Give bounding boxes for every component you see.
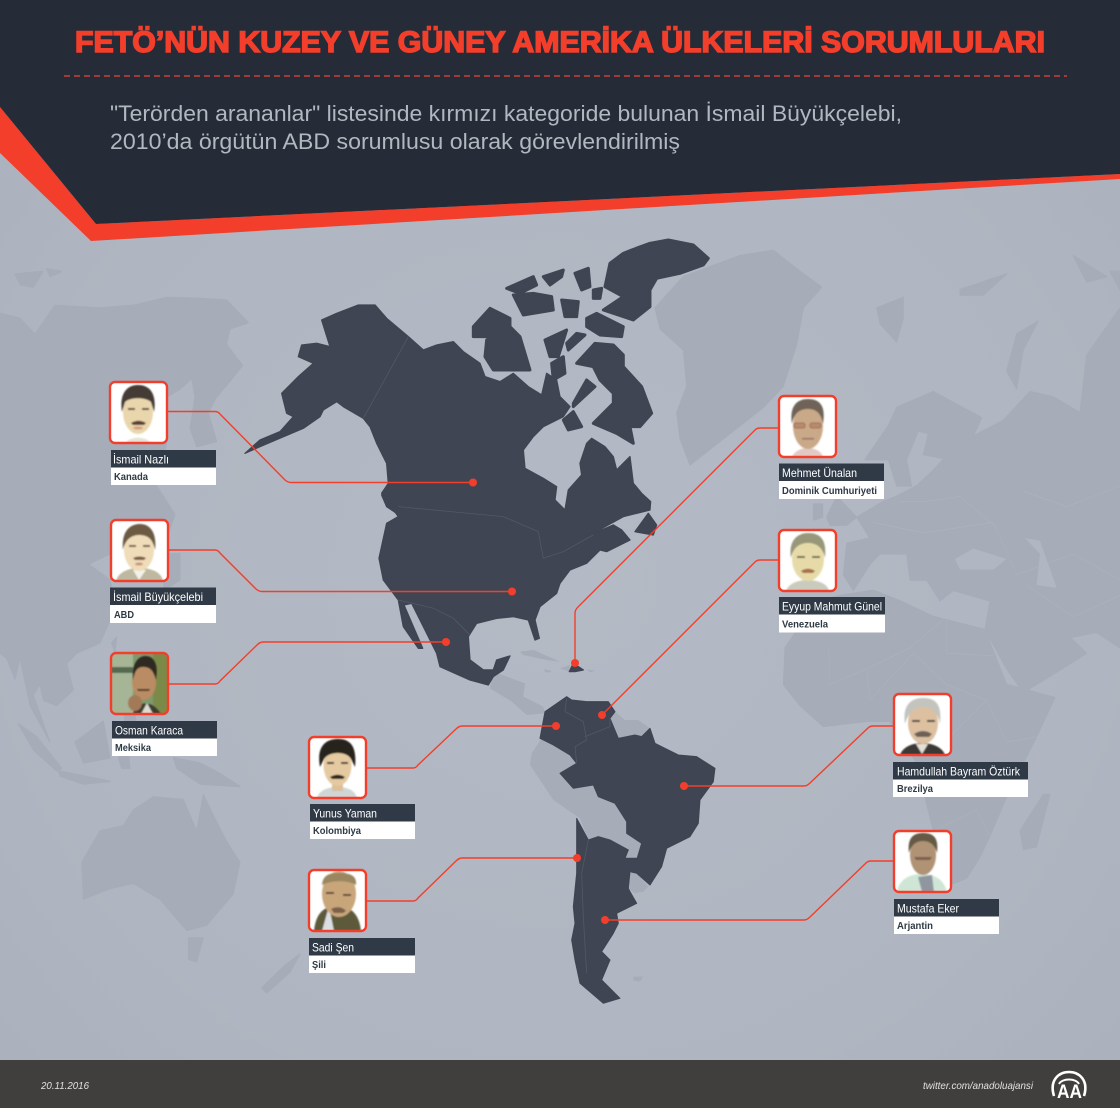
card: Sadi Şen: Sadi Şen: [312, 940, 354, 954]
icon: AA logo: [1053, 1072, 1085, 1103]
connector: Yunus Yaman to Colombia: [366, 722, 560, 768]
subtitle line 1: "Terörden arananlar" listesinde kırmızı kategoride bulunan İsmail Büyükçelebi,: [110, 101, 902, 126]
card: Mehmet Ünalan: [779, 396, 884, 499]
mainland: Alaska, Canada, USA, Mexico: [245, 305, 651, 685]
card: Osman Karaca: [111, 653, 217, 756]
card: Mustafa Eker: [894, 831, 999, 934]
highlighted North America: [245, 240, 708, 685]
header panel: [0, 0, 1120, 241]
Newfoundland: [635, 513, 657, 535]
highlighted South America: [540, 697, 715, 1003]
connector: Mehmet Ünalan to Dominican Republic: [571, 428, 780, 667]
card: İsmail Nazlı: [110, 382, 216, 485]
subtitle line 2: 2010’da örgütün ABD sorumlusu olarak görevlendirilmiş: [110, 129, 680, 154]
card: Eyyup Mahmut Günel: Eyyup Mahmut Günel: [782, 600, 882, 614]
footer bar: [0, 1060, 1120, 1108]
card: Mehmet Ünalan: Dominik Cumhuriyeti: [782, 486, 877, 497]
card: Hamdullah Bayram Öztürk: Hamdullah Bayram Öztürk: [897, 764, 1021, 778]
card: Osman Karaca: Meksika: [115, 743, 151, 754]
connector: Eyyup Mahmut Günel to Venezuela: [598, 560, 780, 719]
card: Yunus Yaman: Yunus Yaman: [313, 806, 377, 820]
connector: Osman Karaca to Mexico: [168, 638, 450, 684]
card: İsmail Büyükçelebi: [110, 520, 216, 623]
card: Eyyup Mahmut Günel: [779, 530, 885, 632]
card: Mustafa Eker: Mustafa Eker: [897, 902, 959, 916]
card: Osman Karaca: Osman Karaca: [115, 724, 183, 738]
Ellesmere and arctic islands: [473, 240, 708, 443]
card: İsmail Nazlı: İsmail Nazlı: [113, 452, 169, 466]
Vancouver Island: [382, 495, 397, 513]
card: Hamdullah Bayram Öztürk: Brezilya: [897, 784, 933, 795]
world land west: Asia and Oceania: [0, 269, 300, 993]
connector: İsmail Büyükçelebi to USA: [168, 550, 516, 596]
card: İsmail Büyükçelebi: ABD: [114, 610, 134, 621]
connector: Hamdullah Bayram Öztürk to Brazil: [680, 726, 895, 790]
card: Yunus Yaman: Kolombiya: [313, 826, 361, 837]
card: Hamdullah Bayram Öztürk: [893, 694, 1028, 797]
icon: AA logo: AA: [1057, 1082, 1082, 1103]
world land east: Greenland, Eurasia, Africa: [655, 250, 1120, 889]
connector: Sadi Şen to Chile: [366, 854, 581, 901]
card: Sadi Şen: [309, 870, 415, 973]
card: Eyyup Mahmut Günel: Venezuela: [782, 620, 828, 630]
Central America, Caribbean, non-highlighted South America: [490, 650, 650, 982]
connector: Mustafa Eker to Argentina: [601, 861, 895, 924]
card: İsmail Nazlı: Kanada: [114, 472, 148, 483]
twitter handle: twitter.com/anadoluajansi: [923, 1080, 1034, 1092]
card: İsmail Büyükçelebi: İsmail Büyükçelebi: [113, 590, 203, 604]
date: 20.11.2016: [40, 1080, 89, 1092]
card: Mehmet Ünalan: Mehmet Ünalan: [782, 466, 857, 480]
card: Sadi Şen: Şili: [312, 960, 326, 971]
connector: İsmail Nazlı to Canada: [167, 412, 477, 486]
Hispaniola: [569, 663, 583, 672]
title: FETÖ’NÜN KUZEY VE GÜNEY AMERİKA ÜLKELERİ SORUMLULARI: [75, 26, 1045, 59]
card: Mustafa Eker: Arjantin: [897, 921, 933, 932]
card: Yunus Yaman: [309, 737, 415, 839]
